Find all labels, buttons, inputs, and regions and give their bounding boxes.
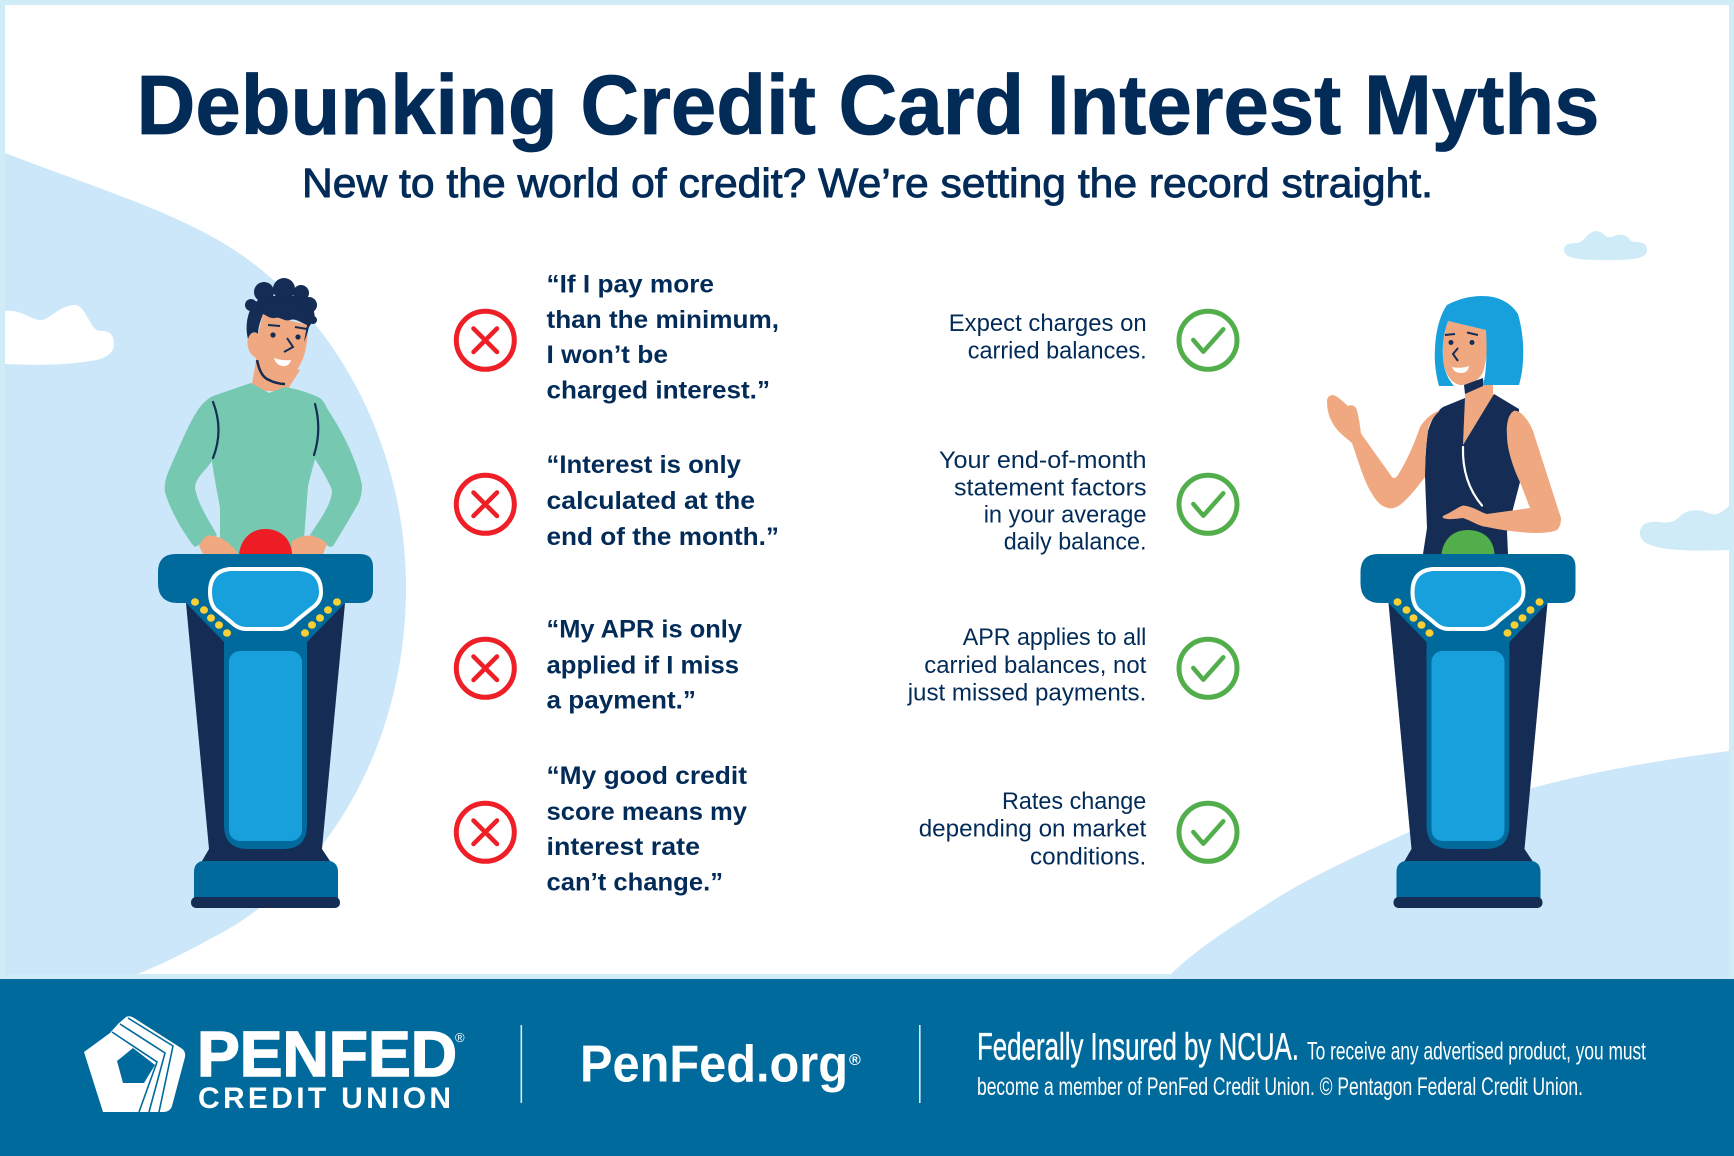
fact 3: carried balances, not [924, 652, 1146, 679]
subtitle: New to the world of credit? We’re setting the record straight. [302, 160, 1433, 206]
fact 2: statement factors [954, 474, 1146, 502]
myth 4: can’t change.” [546, 869, 723, 897]
cloud: middle right [1640, 506, 1729, 551]
website: ® [849, 1052, 861, 1069]
podium: left with red button [158, 529, 373, 908]
fact 2 [939, 447, 1146, 556]
icon: green check 1 [1179, 311, 1237, 369]
myth 3: “My APR is only [546, 616, 742, 644]
myth 2: calculated at the [546, 487, 755, 515]
footer band [0, 979, 1734, 1156]
character: man [165, 278, 362, 554]
button: green [1442, 530, 1494, 554]
fact 3 [907, 624, 1146, 706]
podium: right with green button [1360, 530, 1576, 908]
fact 2: daily balance. [1004, 528, 1146, 556]
myth 3: applied if I miss [546, 652, 739, 680]
disclosure [977, 1026, 1646, 1101]
fact 4 [919, 788, 1146, 870]
dress [1423, 394, 1520, 554]
icon: red x 2 [456, 475, 514, 533]
fact 4: Rates change [1002, 788, 1146, 815]
disclosure: Federally Insured by NCUA. [977, 1026, 1299, 1068]
myth 2: “Interest is only [546, 451, 741, 479]
fact 1: carried balances. [968, 338, 1147, 364]
logo mark [84, 1016, 185, 1112]
fact 4: depending on market [919, 816, 1146, 843]
arm: right on waist [1443, 411, 1561, 533]
fact 1: Expect charges on [949, 310, 1147, 337]
icon: green check 4 [1179, 803, 1237, 861]
myth 1 [546, 271, 779, 404]
fact 2: Your end-of-month [939, 447, 1146, 474]
fact 3: APR applies to all [963, 624, 1146, 651]
button: red [239, 529, 292, 554]
title: Debunking Credit Card Interest Myths [136, 58, 1600, 152]
icon: red x 1 [456, 311, 514, 369]
myth 4: score means my [546, 798, 747, 826]
fact 2: in your average [984, 502, 1146, 528]
myth 3 [546, 616, 742, 714]
logo wordmark: ® [455, 1030, 465, 1045]
fact 3: just missed payments. [907, 680, 1146, 706]
background: right hill [1171, 751, 1729, 979]
myth 2: end of the month.” [546, 523, 779, 551]
hair [1435, 296, 1523, 386]
myth 4: interest rate [546, 833, 700, 861]
fact 1 [949, 310, 1147, 364]
myth 1: than the minimum, [546, 306, 779, 334]
character: woman [1327, 296, 1561, 554]
myth 1: I won’t be [546, 341, 668, 369]
myth 1: “If I pay more [546, 271, 714, 299]
fact 4: conditions. [1030, 843, 1146, 870]
head [1443, 321, 1487, 385]
background: left circle [5, 153, 406, 975]
myth 4: “My good credit [546, 762, 748, 790]
myth 4 [546, 762, 748, 897]
icon: red x 4 [456, 803, 514, 861]
hair [245, 278, 317, 342]
myth 2 [546, 451, 779, 551]
icon: red x 3 [456, 639, 514, 697]
myth 1: charged interest.” [546, 376, 770, 404]
cloud: top right [1564, 231, 1647, 260]
cloud: left [5, 305, 114, 365]
icon: green check 3 [1179, 639, 1237, 697]
icon: green check 2 [1179, 475, 1237, 533]
logo wordmark: PENFED [197, 1018, 457, 1090]
logo wordmark: CREDIT UNION [198, 1082, 451, 1115]
arm: left raised [1327, 395, 1440, 508]
myth 3: a payment.” [546, 686, 696, 714]
website: PenFed.org [580, 1036, 848, 1094]
sweater [165, 383, 362, 554]
